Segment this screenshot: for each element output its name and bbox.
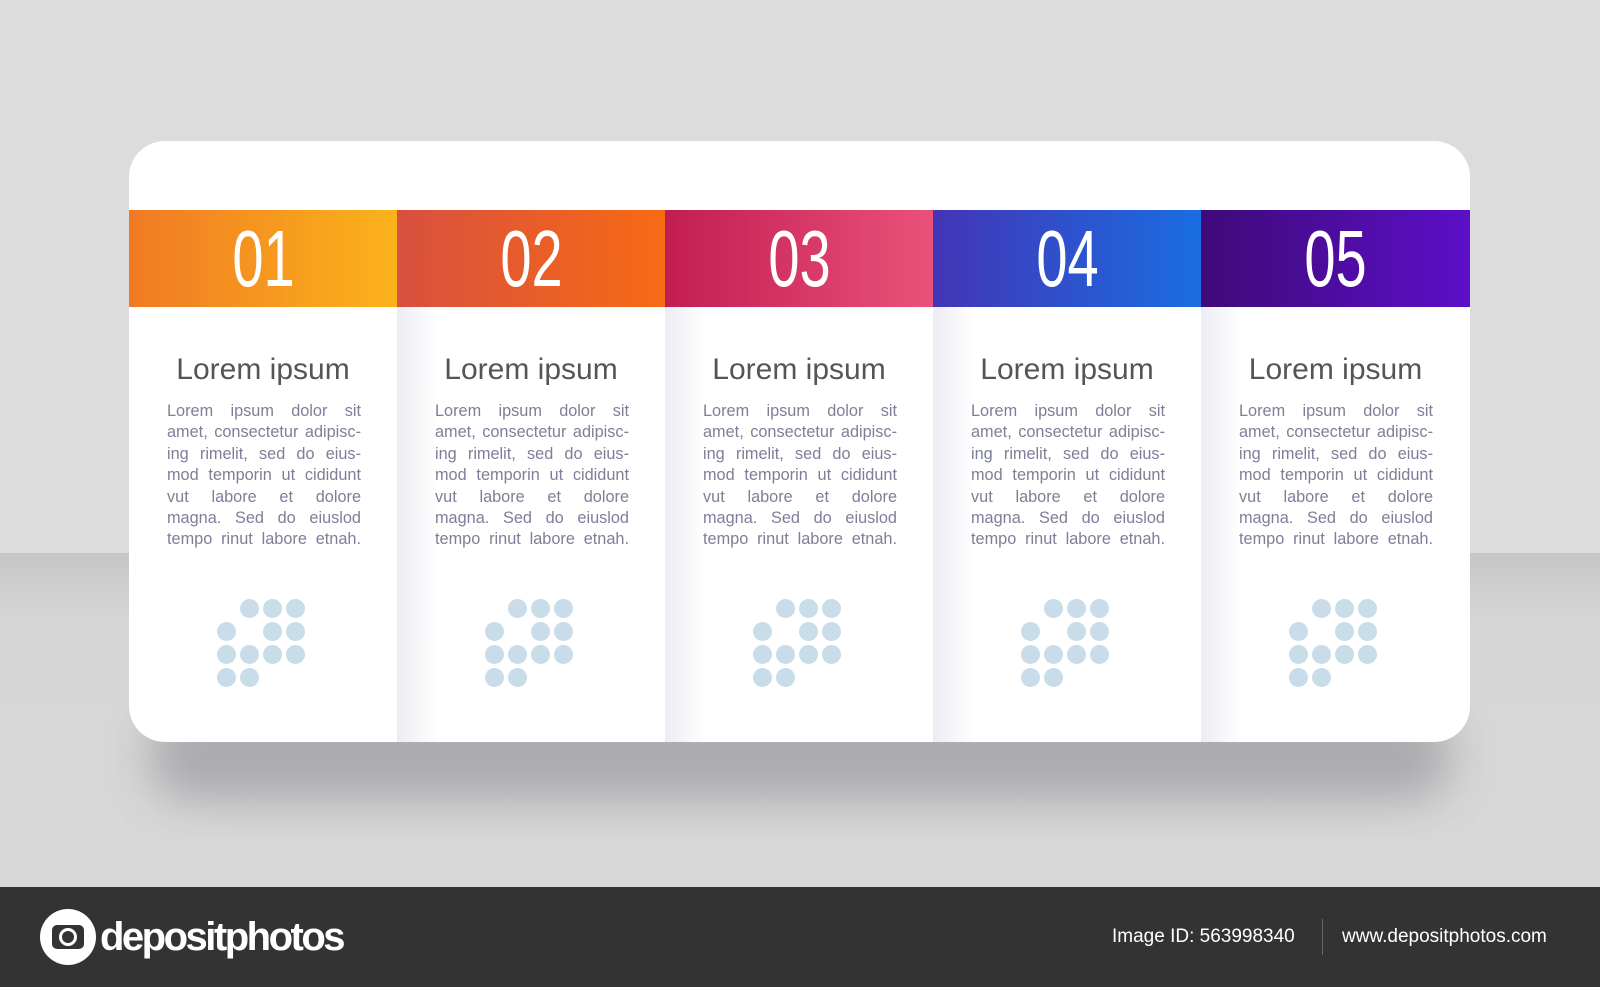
band 02: 02 [500, 214, 562, 303]
text 1: mod temporin ut cididunt [167, 466, 361, 484]
column 2 [397, 210, 665, 742]
text 3: tempo rinut labore etnah. [703, 530, 897, 548]
band 04: 04 [1036, 214, 1098, 303]
text 2: mod temporin ut cididunt [435, 466, 629, 484]
text 3: mod temporin ut cididunt [703, 466, 897, 484]
text 1: tempo rinut labore etnah. [167, 530, 361, 548]
heading 5: Lorem ipsum [1249, 353, 1422, 386]
text 1: ing rimelit, sed do eius- [167, 445, 361, 463]
text 2: vut labore et dolore [435, 488, 629, 506]
text 3: amet, consectetur adipisc- [703, 423, 897, 441]
column 5 [1201, 210, 1470, 742]
text 5: Lorem ipsum dolor sit [1239, 402, 1433, 420]
heading 1: Lorem ipsum [176, 353, 350, 386]
text 1: Lorem ipsum dolor sit [167, 402, 361, 420]
text 4: vut labore et dolore [971, 488, 1165, 506]
text 5: amet, consectetur adipisc- [1239, 423, 1433, 441]
column 3 [665, 210, 933, 742]
band 05 [1201, 210, 1470, 307]
text 2: amet, consectetur adipisc- [435, 423, 629, 441]
text 1 [167, 402, 361, 548]
text 5: ing rimelit, sed do eius- [1239, 445, 1433, 463]
text 5: tempo rinut labore etnah. [1239, 530, 1433, 548]
icon dots 4 [1021, 599, 1109, 687]
text 2: tempo rinut labore etnah. [435, 530, 629, 548]
logo text: depositphotos [100, 915, 343, 959]
text 4: tempo rinut labore etnah. [971, 530, 1165, 548]
text 1: magna. Sed do eiuslod [167, 509, 361, 527]
text 4: magna. Sed do eiuslod [971, 509, 1165, 527]
band 01: 01 [232, 214, 294, 303]
text 2: magna. Sed do eiuslod [435, 509, 629, 527]
band 03 [665, 210, 933, 307]
text 1: vut labore et dolore [167, 488, 361, 506]
text 2: Lorem ipsum dolor sit [435, 402, 629, 420]
text 4: ing rimelit, sed do eius- [971, 445, 1165, 463]
column 4 [933, 210, 1201, 742]
text 4 [971, 402, 1165, 548]
band 04 [933, 210, 1201, 307]
text 5 [1239, 402, 1433, 548]
text 3: Lorem ipsum dolor sit [703, 402, 897, 420]
band 05: 05 [1304, 214, 1367, 303]
band 02 [397, 210, 665, 307]
icon dots 1 [217, 599, 305, 687]
heading 4: Lorem ipsum [980, 353, 1154, 386]
text 5: mod temporin ut cididunt [1239, 466, 1433, 484]
band 03: 03 [768, 214, 830, 303]
text 2 [435, 402, 629, 548]
text 4: mod temporin ut cididunt [971, 466, 1165, 484]
icon dots 2 [485, 599, 573, 687]
heading 2: Lorem ipsum [444, 353, 618, 386]
website: www.depositphotos.com [1342, 926, 1547, 947]
heading 3: Lorem ipsum [712, 353, 886, 386]
text 2: ing rimelit, sed do eius- [435, 445, 629, 463]
text 4: amet, consectetur adipisc- [971, 423, 1165, 441]
footer bar [0, 887, 1600, 987]
text 3: magna. Sed do eiuslod [703, 509, 897, 527]
icon dots 3 [753, 599, 841, 687]
band 01 [129, 210, 397, 307]
text 3: vut labore et dolore [703, 488, 897, 506]
text 5: vut labore et dolore [1239, 488, 1433, 506]
text 5: magna. Sed do eiuslod [1239, 509, 1433, 527]
text 3: ing rimelit, sed do eius- [703, 445, 897, 463]
text 1: amet, consectetur adipisc- [167, 423, 361, 441]
text 3 [703, 402, 897, 548]
text 4: Lorem ipsum dolor sit [971, 402, 1165, 420]
panel: card [129, 141, 1470, 742]
image id: Image ID: 563998340 [1112, 926, 1295, 947]
icon dots 5 [1289, 599, 1377, 687]
logo icon [40, 909, 96, 965]
column 1 [129, 210, 397, 687]
